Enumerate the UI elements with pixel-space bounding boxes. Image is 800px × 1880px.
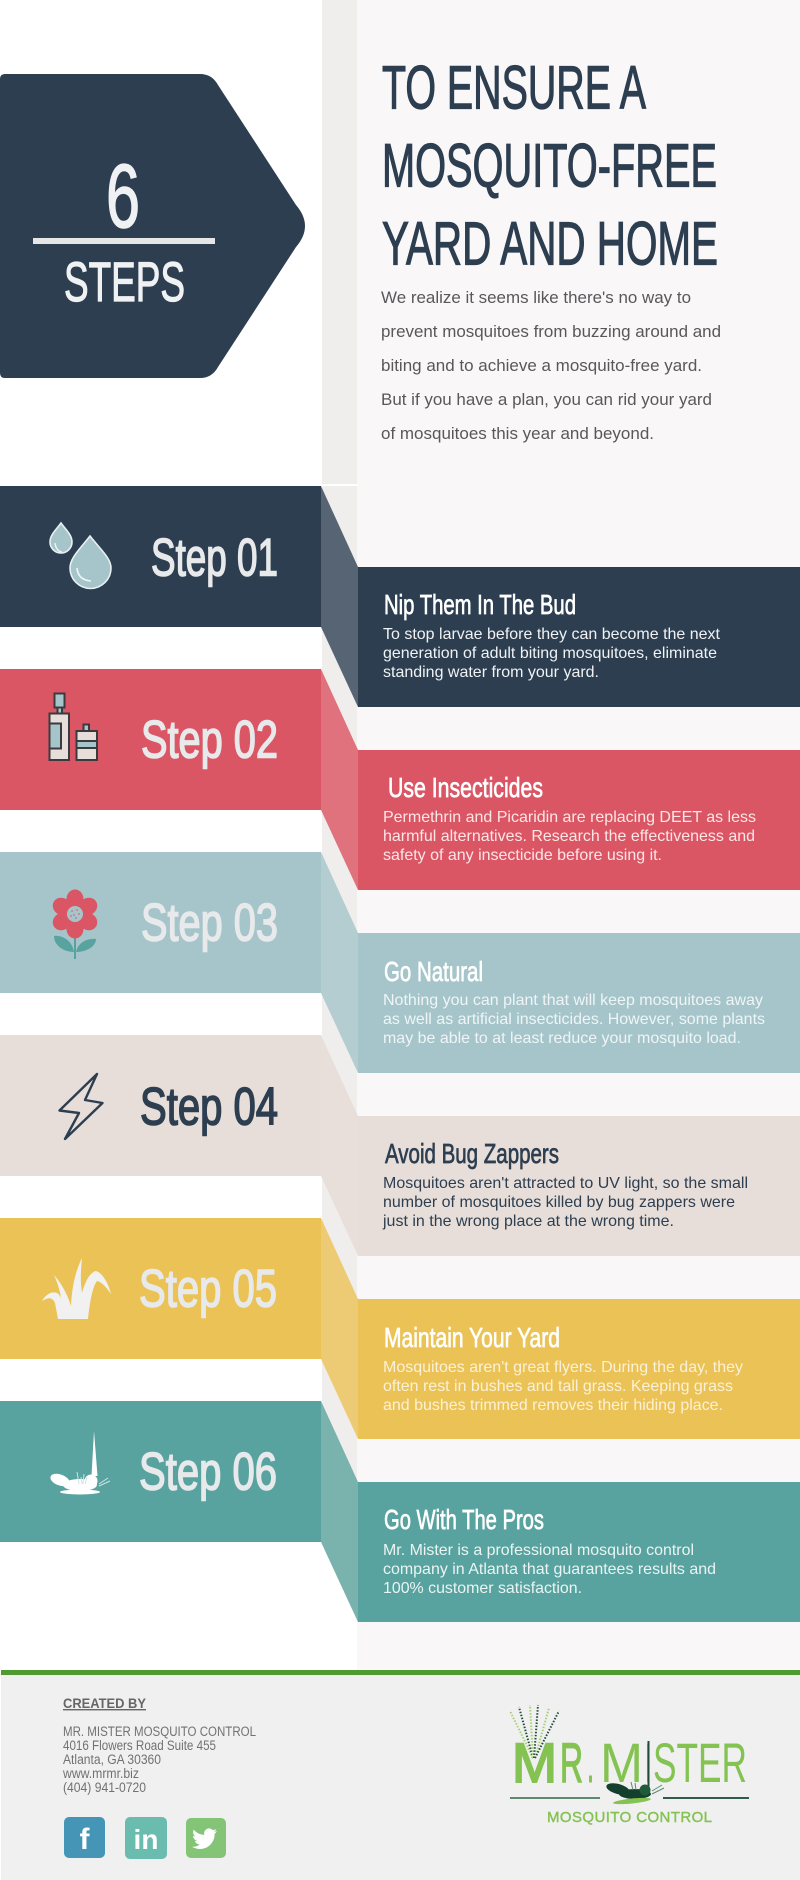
logo wordmark: R (560, 1731, 583, 1794)
panel: go with the pros: Mr. Mister is a professional mosquito control (383, 1542, 694, 1559)
step 05 (0, 1218, 800, 1439)
panel: maintain your yard: Mosquitoes aren't great flyers. During the day, they (383, 1359, 743, 1376)
logo: Mr. Mister Mosquito Control: MOSQUITO CONTROL (547, 1809, 712, 1826)
panel: maintain your yard: and bushes trimmed removes their hiding place. (383, 1397, 723, 1414)
panel: go natural (358, 933, 800, 1073)
hexagon badge: 6 steps: STEPS (64, 250, 185, 313)
mist fan (510, 1705, 559, 1758)
step label: Step 01 (151, 528, 278, 588)
panel: nip them in the bud: generation of adult biting mosquitoes, eliminate (383, 645, 717, 662)
step 03 (0, 852, 800, 1073)
logo: Mr. Mister Mosquito Control (510, 1705, 749, 1826)
icon: linkedin (125, 1817, 167, 1859)
icon: twitter (186, 1818, 226, 1858)
title (382, 54, 718, 278)
panel: go with the pros (358, 1482, 800, 1622)
icon: flower (50, 890, 100, 959)
title: TO ENSURE A (382, 54, 646, 122)
logo wordmark: . (587, 1731, 594, 1794)
intro text block: prevent mosquitoes from buzzing around and (381, 322, 721, 341)
panel: avoid bug zappers: Avoid Bug Zappers (385, 1138, 559, 1169)
logo wordmark (512, 1731, 747, 1794)
intro text block: biting and to achieve a mosquito-free yard. (381, 356, 702, 375)
panel: use insecticides: harmful alternatives. Research the effectiveness and (383, 828, 755, 845)
credits text block: CREATED BY (63, 1695, 147, 1711)
intro text block (381, 288, 721, 443)
panel: use insecticides: Permethrin and Picaridin are replacing DEET as less (383, 809, 756, 826)
panel: use insecticides (358, 750, 800, 890)
intro text block: of mosquitoes this year and beyond. (381, 424, 654, 443)
logo wordmark: M (512, 1731, 557, 1794)
panel: use insecticides: safety of any insecticide before using it. (383, 847, 662, 864)
panel: avoid bug zappers: number of mosquitoes killed by bug zappers were (383, 1194, 735, 1211)
panel: use insecticides: Use Insecticides (388, 772, 543, 803)
logo wordmark: I (646, 1731, 650, 1794)
step label: Step 03 (141, 894, 278, 952)
credits text block: (404) 941-0720 (63, 1780, 146, 1795)
icon: grass (42, 1258, 111, 1319)
step label: Step 05 (139, 1260, 277, 1318)
panel: go with the pros: company in Atlanta that guarantees results and (383, 1561, 716, 1578)
step label: Step 06 (139, 1442, 277, 1502)
step label: Step 02 (141, 710, 278, 770)
footer (1, 1670, 800, 1880)
panel: go natural: as well as artificial insecticides. However, some plants (383, 1011, 765, 1028)
icon: facebook (64, 1817, 105, 1858)
step 06 (0, 1401, 800, 1622)
icon: linkedin: in (134, 1824, 158, 1855)
panel: nip them in the bud: Nip Them In The Bud (384, 589, 576, 620)
credits text block: 4016 Flowers Road Suite 455 (63, 1738, 216, 1753)
credits text block: www.mrmr.biz (62, 1766, 139, 1781)
panel: go natural: Nothing you can plant that will keep mosquitoes away (383, 992, 763, 1009)
panel: nip them in the bud (358, 567, 800, 707)
credits text block (62, 1695, 256, 1795)
panel: avoid bug zappers (358, 1116, 800, 1256)
panel: maintain your yard: often rest in bushes and tall grass. Keeping grass (383, 1378, 733, 1395)
intro text block: But if you have a plan, you can rid your yard (381, 390, 712, 409)
panel: maintain your yard (358, 1299, 800, 1439)
step label: Step 04 (140, 1078, 278, 1136)
credits text block: MR. MISTER MOSQUITO CONTROL (63, 1724, 256, 1739)
credits text block: Atlanta, GA 30360 (63, 1752, 161, 1767)
panel: go natural: may be able to at least reduce your mosquito load. (383, 1030, 741, 1047)
mosquito mark (605, 1741, 664, 1805)
panel: nip them in the bud: standing water from your yard. (383, 664, 599, 681)
icon: facebook: f (80, 1823, 90, 1856)
icon: insecticide bottles (50, 694, 97, 760)
step 04 (0, 1035, 800, 1256)
panel: avoid bug zappers: Mosquitoes aren't attracted to UV light, so the small (383, 1175, 748, 1192)
panel: go with the pros: Go With The Pros (384, 1504, 544, 1535)
panel: go with the pros: 100% customer satisfaction. (383, 1580, 582, 1597)
panel: go natural: Go Natural (384, 956, 483, 987)
step 01 (0, 486, 800, 707)
icon: water drops (50, 523, 111, 588)
step 02 (0, 669, 800, 890)
intro text block: We realize it seems like there's no way to (381, 288, 691, 307)
hexagon badge: 6 steps (0, 74, 305, 378)
panel: avoid bug zappers: just in the wrong place at the wrong time. (382, 1213, 674, 1230)
logo wordmark: STER (653, 1731, 747, 1794)
icon: lightning bolt (60, 1074, 102, 1139)
logo wordmark: M (600, 1731, 643, 1794)
panel: nip them in the bud: To stop larvae before they can become the next (383, 626, 721, 643)
icon: mosquito (49, 1431, 110, 1494)
hexagon badge: 6 steps: 6 (106, 147, 140, 247)
panel: maintain your yard: Maintain Your Yard (384, 1322, 560, 1353)
